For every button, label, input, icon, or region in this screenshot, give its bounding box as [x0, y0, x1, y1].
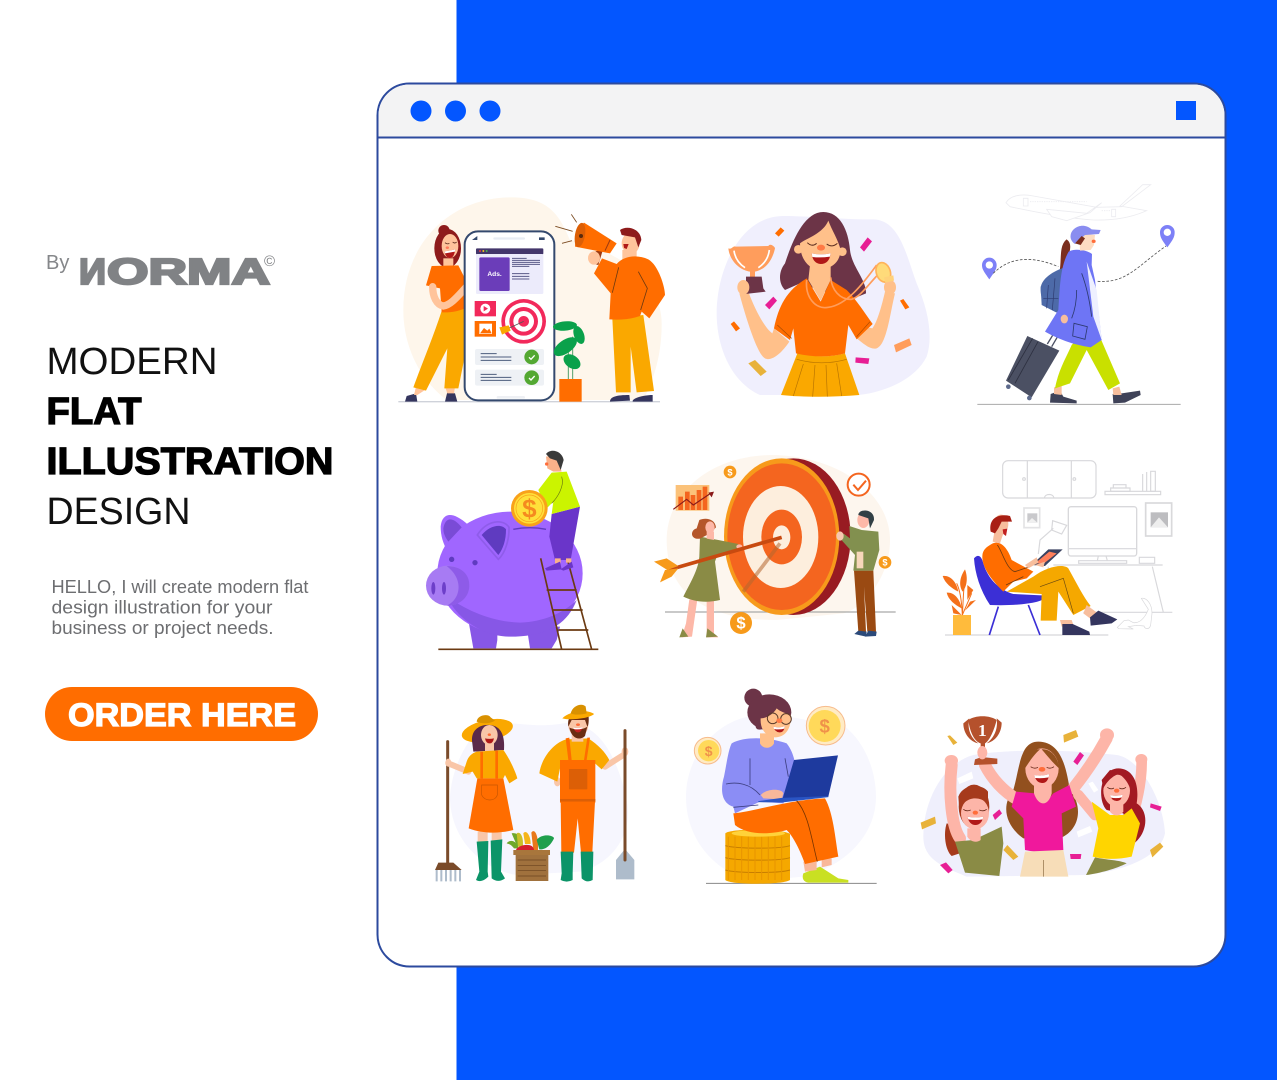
center woman — [985, 728, 1114, 877]
trophy number one — [963, 716, 1002, 765]
illustration: three cheering women — [921, 716, 1165, 877]
title: MODERN — [46, 341, 218, 383]
shovel — [616, 731, 634, 879]
chart card — [673, 485, 714, 511]
man with coin: $ — [522, 494, 537, 524]
pig — [426, 512, 583, 648]
description text: design illustration for your — [52, 598, 272, 618]
ladder — [541, 557, 592, 649]
logo: By NORMA — [46, 251, 275, 292]
confetti — [731, 227, 912, 376]
illustration: farmers — [435, 705, 634, 882]
cat outline — [1117, 598, 1152, 629]
phone — [465, 231, 554, 400]
woman farmer — [445, 715, 517, 881]
woman figure — [739, 212, 896, 397]
chair — [974, 556, 1047, 635]
description text — [52, 577, 308, 638]
title — [46, 341, 334, 533]
coins: $ — [819, 716, 830, 737]
description text: business or project needs. — [52, 618, 274, 638]
title: DESIGN — [46, 491, 190, 533]
dollar coins: $ — [882, 558, 888, 568]
dollar coins: $ — [727, 467, 733, 477]
suitcase — [1006, 323, 1065, 400]
illustration: target with arrow — [654, 455, 896, 637]
left girl — [945, 755, 1003, 876]
target rings — [724, 458, 851, 615]
vegetable crate — [507, 831, 554, 881]
logo: By NORMA: ORMA — [107, 251, 270, 292]
rake — [435, 742, 462, 881]
phone: Ads. — [487, 271, 502, 278]
dollar coins: $ — [736, 614, 746, 633]
airplane outline — [1006, 185, 1151, 221]
right girl — [1078, 754, 1147, 875]
logo: By NORMA: © — [264, 253, 275, 270]
button: order here: ORDER HERE — [68, 697, 296, 733]
logo: By NORMA: By — [46, 252, 69, 274]
man holding target — [836, 510, 879, 637]
room outlines — [945, 461, 1172, 635]
illustration: traveler with suitcase — [977, 185, 1181, 404]
blue background panel — [456, 0, 1277, 1080]
logo: By NORMA: N — [79, 251, 106, 292]
woman pointing at phone — [405, 225, 470, 402]
illustration: piggy bank — [426, 451, 598, 649]
illustration: woman with trophy and medal — [717, 212, 930, 397]
man with coin — [511, 451, 580, 571]
title: ILLUSTRATION — [46, 441, 334, 483]
plant — [943, 569, 976, 635]
trophy number one: 1 — [978, 721, 987, 740]
coins — [694, 706, 845, 764]
coins: $ — [705, 743, 713, 759]
traveler figure — [1041, 226, 1141, 403]
browser window panel — [378, 84, 1226, 966]
plant in pot — [551, 320, 587, 402]
man with megaphone — [555, 214, 665, 402]
coin stack — [725, 830, 790, 884]
check badge — [848, 474, 870, 496]
illustration: woman on coins with laptop — [686, 689, 877, 884]
illustration: man with tablet at desk — [943, 461, 1172, 635]
title: FLAT — [46, 391, 142, 433]
trophy — [728, 245, 775, 295]
illustration: phone marketing — [398, 197, 665, 402]
picture frames — [1024, 503, 1172, 536]
description text: HELLO, I will create modern flat — [52, 577, 308, 597]
seated woman — [722, 689, 848, 883]
seated man — [982, 515, 1117, 635]
button: order here — [45, 687, 318, 741]
woman holding arrow — [679, 519, 742, 637]
window title bar — [378, 84, 1224, 137]
dollar coins — [724, 466, 891, 634]
man farmer — [539, 705, 628, 882]
location pins and route — [982, 225, 1175, 281]
arrow — [654, 537, 782, 582]
confetti — [921, 730, 1163, 873]
